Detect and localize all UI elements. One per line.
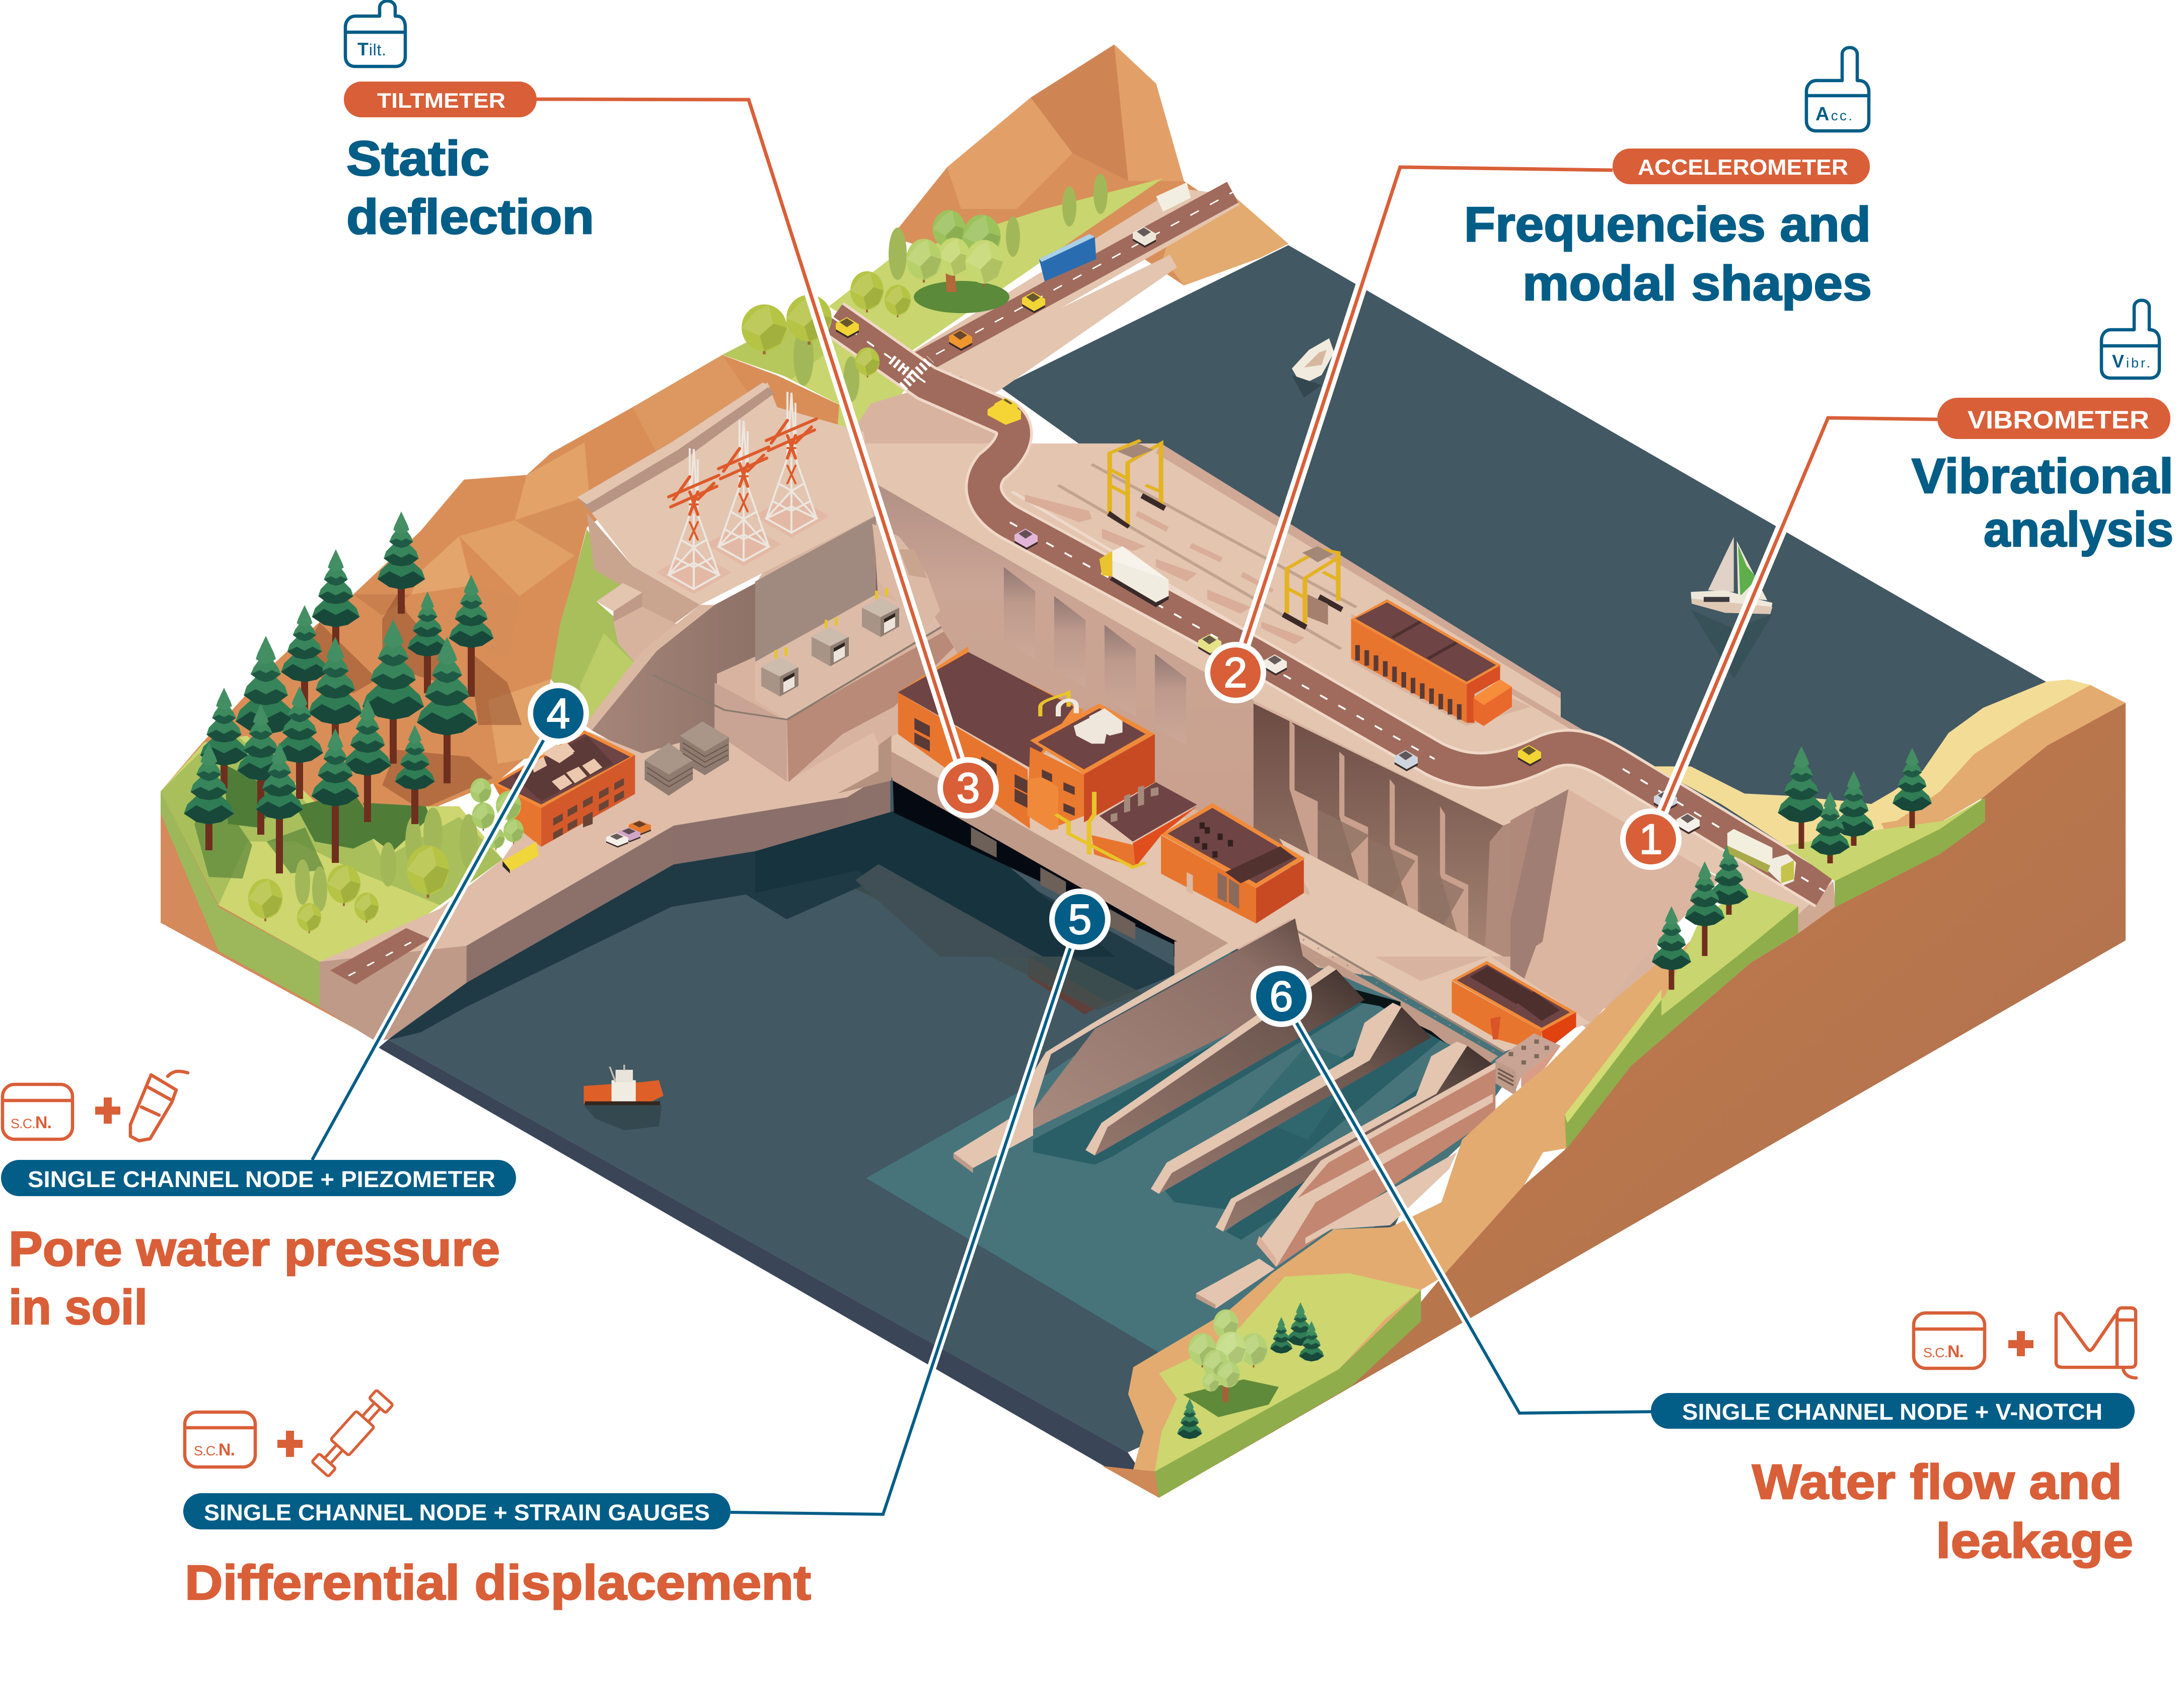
yellow pipe <box>1056 792 1146 867</box>
reflection in water <box>755 803 1174 957</box>
abutment by road <box>320 946 467 1042</box>
powerhouse buildings <box>898 646 1305 923</box>
dam: recessed panels <box>1004 567 1186 745</box>
round trees <box>248 271 911 933</box>
marker 2 <box>1205 642 1266 703</box>
terrain: left orange face <box>161 791 376 1040</box>
substation, towers terrace and plaza walls <box>320 383 906 1042</box>
label block: tiltmeter <box>344 1 594 244</box>
cooling units <box>645 721 729 795</box>
icon: vibrometer sensor: Vibr. <box>2112 351 2150 372</box>
tanker truck <box>1727 829 1796 886</box>
left hill <box>161 355 839 870</box>
heading: pore water pressure in soil: Pore water pressure <box>9 1221 500 1276</box>
pine foliage left forest <box>184 511 493 825</box>
parked cars <box>606 821 651 848</box>
dam face <box>860 453 1254 838</box>
icon: plus <box>2008 1331 2033 1356</box>
dam structure <box>652 444 1561 957</box>
icon: single channel node: S.C.N. <box>11 1113 52 1132</box>
icon: single channel node <box>1914 1313 1985 1368</box>
label block: piezometer <box>1 1071 516 1335</box>
terrace: back ridge <box>577 383 775 513</box>
vehicles on road <box>836 182 1796 886</box>
truck on top road <box>1156 182 1191 212</box>
small generator block <box>1091 782 1197 867</box>
icon: plus <box>277 1431 303 1457</box>
terrace: side slope <box>587 513 700 626</box>
connector 2: accelerometer <box>1235 167 1613 673</box>
icon: tiltmeter sensor: Tilt. <box>357 39 386 59</box>
terrain: left green band <box>161 791 320 1007</box>
icon: single channel node: S.C.N. <box>194 1440 235 1459</box>
trees: top and round tree groups <box>248 174 1279 1417</box>
connector 1: vibrometer <box>1651 418 1937 839</box>
far bridge and plaza <box>1287 914 1590 1052</box>
plaza surface <box>320 732 890 962</box>
icon: accelerometer sensor: Acc. <box>1815 104 1852 125</box>
connector 6: v-notch <box>1281 996 1659 1413</box>
switch building <box>1495 1033 1561 1089</box>
wall 1 (main guide wall) <box>1033 918 1336 1129</box>
pill: v-notch <box>1651 1393 2135 1429</box>
marker 4 <box>528 683 589 744</box>
marker 2: 2 <box>1224 649 1247 696</box>
gate piers <box>1289 719 1468 957</box>
crest rails and blocks <box>1012 464 1449 752</box>
heading: static deflection <box>346 131 594 244</box>
pine trunks <box>209 554 1912 990</box>
tug boat <box>584 1065 664 1130</box>
tree cluster lower right <box>1183 1309 1279 1417</box>
connector 4: piezometer <box>312 713 558 1160</box>
icon: tiltmeter sensor <box>345 1 405 66</box>
marker 1 <box>1620 809 1682 870</box>
transmission towers <box>656 393 829 594</box>
white truck <box>1100 546 1169 607</box>
upper reservoir water <box>1000 245 2048 896</box>
connector 5: strain gauges <box>731 919 1080 1514</box>
heading: pore water pressure in soil <box>9 1221 500 1335</box>
right terrain block <box>1103 680 2126 1498</box>
ambulance van <box>988 400 1021 425</box>
heading: water flow and leakage: Water flow and <box>1752 1454 2122 1509</box>
icon: strain gauge <box>311 1389 394 1477</box>
label block: vibrometer <box>1912 300 2173 557</box>
quay wall <box>467 771 890 983</box>
heading: vibrational analysis: Vibrational <box>1912 449 2173 503</box>
label block: strain gauges <box>183 1389 811 1610</box>
marker 4: 4 <box>547 690 570 737</box>
wall 4 <box>1223 1046 1493 1231</box>
terrain: forest floor <box>161 736 502 962</box>
apron strip <box>1196 1259 1275 1309</box>
right abutment of dam <box>1510 687 1836 1030</box>
marker 3: 3 <box>957 764 980 812</box>
gate right side <box>1485 803 1561 957</box>
icon: v-notch <box>2056 1308 2136 1378</box>
sailboat <box>1691 537 1773 679</box>
tailrace teal water <box>866 952 1524 1353</box>
pine foliage small lower <box>1177 1302 1324 1439</box>
transformers <box>761 588 899 697</box>
road along dam crest <box>833 318 1825 892</box>
terrain: right shore <box>1510 680 2126 1158</box>
terrain: lower right shore and grass <box>1103 960 1661 1498</box>
quay reflection <box>388 806 906 1040</box>
lower-left buildings and coolers <box>493 721 729 873</box>
tree cluster top <box>906 210 1009 313</box>
icon: single channel node: S.C.N. <box>1923 1342 1964 1361</box>
small white boat <box>1292 338 1334 398</box>
icon: single channel node <box>3 1084 72 1139</box>
marker 6 <box>1251 966 1312 1027</box>
under platform dark opening <box>893 781 1215 957</box>
small orange transformer building <box>1452 961 1576 1052</box>
pine trees <box>184 511 1932 1439</box>
pill: strain gauges <box>183 1493 731 1529</box>
icon: single channel node <box>185 1412 255 1467</box>
icon: piezometer <box>130 1071 188 1141</box>
abutment slope <box>1525 789 1721 1030</box>
lower reservoir water <box>379 755 1460 1498</box>
pill: piezometer <box>1 1160 516 1196</box>
spillway walls <box>954 910 1590 1309</box>
pill: vibrometer: VIBROMETER <box>1968 406 2149 434</box>
pine foliage right shore <box>1652 746 1932 970</box>
heading: static deflection: deflection <box>346 189 594 244</box>
tree cluster left <box>470 778 524 850</box>
apron reflection under the platform <box>856 856 1175 1014</box>
cars <box>836 227 1700 834</box>
dam crest surface <box>860 444 1561 826</box>
marker 3 <box>937 757 999 819</box>
terrace: upper surface <box>577 383 873 605</box>
pill: accelerometer <box>1613 149 1870 184</box>
forest floor and left block <box>161 736 502 1040</box>
icon: plus <box>95 1097 120 1124</box>
heading: water flow and leakage <box>1752 1454 2133 1568</box>
water: dark surface <box>388 755 1460 1452</box>
pill: piezometer: SINGLE CHANNEL NODE + PIEZOMETER <box>28 1166 495 1192</box>
substation fence <box>652 620 953 719</box>
yellow van <box>502 842 539 873</box>
gantry cranes <box>1107 440 1343 630</box>
office building <box>493 730 635 847</box>
heading: pore water pressure in soil: in soil <box>9 1280 148 1335</box>
label block: accelerometer <box>1464 47 1872 311</box>
platform, powerhouse underside and water reflection <box>755 716 1503 957</box>
pill: tiltmeter: TILTMETER <box>377 89 505 112</box>
water: front edge band <box>379 1040 1159 1498</box>
heading: static deflection: Static <box>346 131 489 186</box>
heading: frequencies and modal shapes: modal shapes <box>1522 256 1872 311</box>
cypress trees <box>295 174 1108 912</box>
platform front <box>880 745 1230 957</box>
connector lines <box>312 99 1937 1514</box>
marker 5 <box>1049 889 1111 950</box>
wall 3 <box>1159 1007 1431 1194</box>
pill: vibrometer <box>1937 398 2170 439</box>
substation: right wall and surface <box>755 516 876 662</box>
top crest building <box>1351 599 1531 726</box>
connector 3: tiltmeter <box>537 99 968 788</box>
pill: strain gauges: SINGLE CHANNEL NODE + STRAIN GAUGES <box>204 1500 710 1525</box>
platform surface <box>880 716 1310 944</box>
marker 5: 5 <box>1068 896 1091 943</box>
dam underlay <box>696 376 1671 1114</box>
dam: side steps <box>872 524 940 630</box>
boats <box>584 338 1773 1130</box>
heading: differential displacement: Differential displacement <box>185 1555 811 1610</box>
heading: frequencies and modal shapes <box>1464 197 1872 311</box>
top left grass slope <box>722 305 904 491</box>
marker 1: 1 <box>1639 816 1662 863</box>
upper hill and top road land <box>829 45 1288 404</box>
heading: vibrational analysis: analysis <box>1984 502 2173 557</box>
pill: accelerometer: ACCELEROMETER <box>1638 155 1848 180</box>
label block: v-notch <box>1651 1308 2136 1568</box>
pill: v-notch: SINGLE CHANNEL NODE + V-NOTCH <box>1682 1399 2102 1425</box>
heading: frequencies and modal shapes: Frequencies and <box>1464 197 1871 252</box>
heading: water flow and leakage: leakage <box>1936 1513 2133 1568</box>
terrace: buttress wall <box>592 520 878 806</box>
marker 6: 6 <box>1270 973 1293 1020</box>
icon: vibrometer sensor <box>2101 300 2159 378</box>
right training wall <box>1257 1065 1495 1267</box>
substation wall <box>714 683 787 781</box>
second powerhouse block <box>1028 703 1155 830</box>
heading: vibrational analysis <box>1912 449 2173 557</box>
gates recess <box>1254 703 1503 957</box>
powerhouse: yellow and white pipes <box>1040 692 1068 716</box>
control building <box>1161 803 1305 923</box>
crest blocks <box>1025 495 1305 644</box>
icon: accelerometer sensor <box>1806 47 1869 131</box>
bus <box>1039 234 1096 281</box>
main powerhouse <box>898 646 1084 829</box>
terrain: right orange face <box>1159 703 2126 1498</box>
pill: tiltmeter <box>344 82 537 117</box>
wall 2 <box>1095 970 1364 1155</box>
